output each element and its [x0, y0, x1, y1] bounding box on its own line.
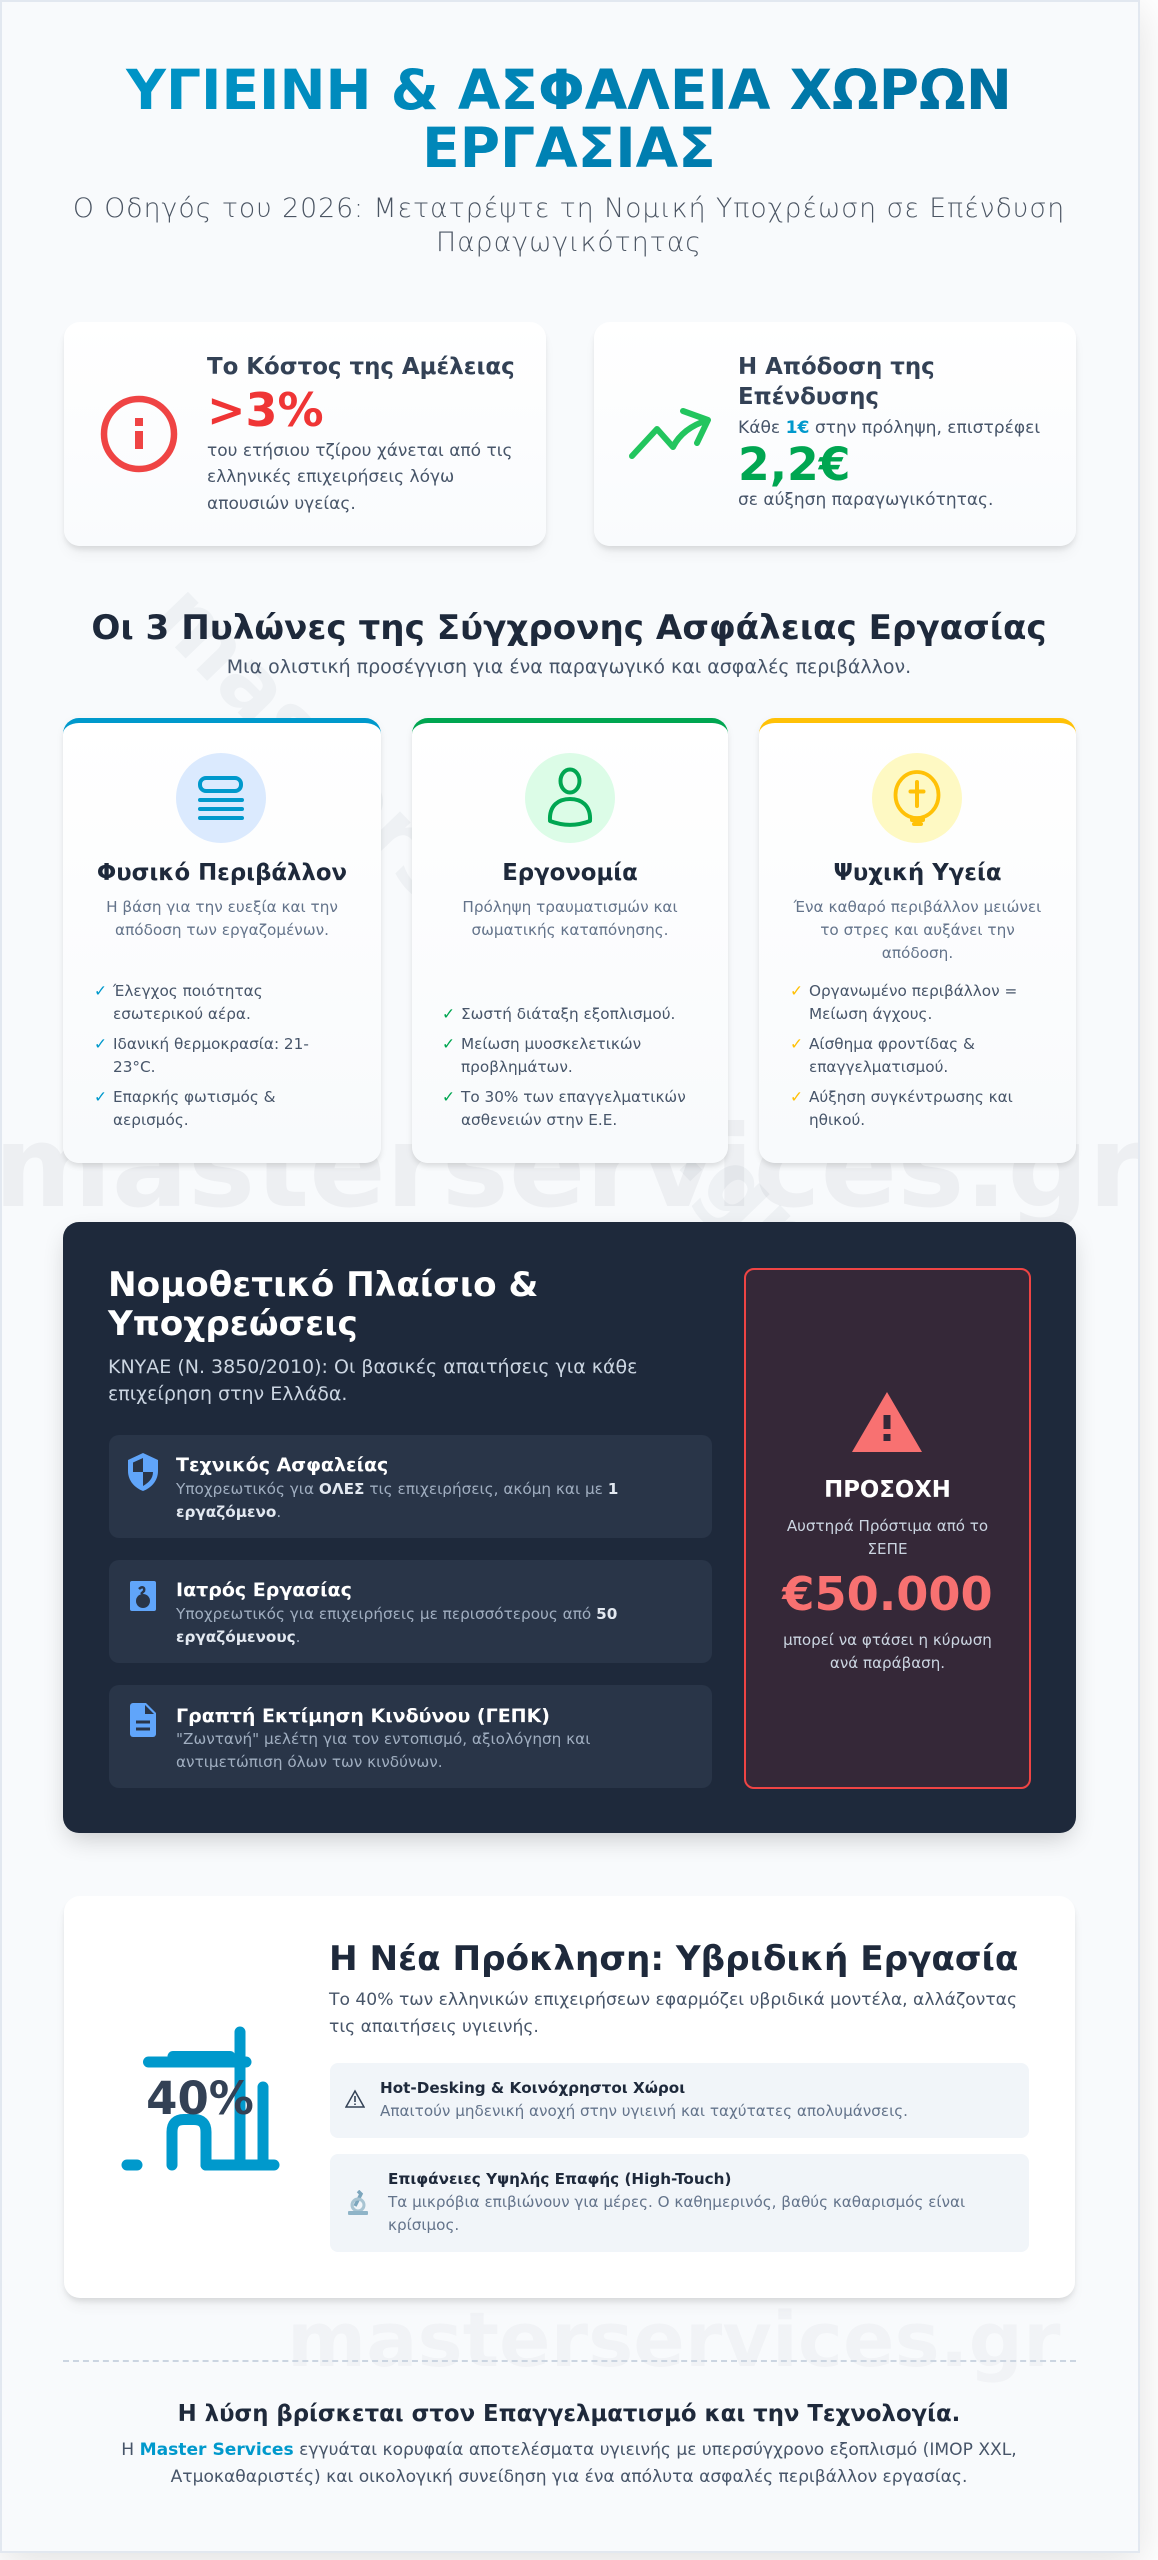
- icon: red info circle: [100, 396, 178, 472]
- list item: Μείωση άγχους.: [809, 1005, 932, 1023]
- title: Τεχνικός Ασφαλείας: [176, 1454, 388, 1476]
- obligation: risk assessment: [109, 1685, 712, 1788]
- obligation: occupational doctor: [109, 1560, 712, 1663]
- title: Ιατρός Εργασίας: [176, 1579, 352, 1601]
- list item: 23°C.: [113, 1058, 156, 1076]
- description 2: ανά παράβαση.: [830, 1654, 945, 1672]
- heading: Εργονομία: [502, 860, 638, 886]
- list item: Αίσθημα φροντίδας &: [809, 1035, 975, 1053]
- description: [794, 898, 1041, 962]
- title: [2, 62, 1136, 177]
- list item: [94, 1088, 276, 1129]
- list item: επαγγελματισμού.: [809, 1058, 948, 1076]
- checklist: ✓: [94, 1088, 107, 1106]
- subtitle: [73, 193, 1065, 258]
- checklist: ✓: [442, 1035, 455, 1053]
- list item: αερισμός.: [113, 1111, 189, 1129]
- heading: Νομοθετικό Πλαίσιο &: [108, 1265, 538, 1305]
- list item: [790, 1088, 1013, 1129]
- footer heading: Η λύση βρίσκεται στον Επαγγελματισμό και την Τεχνολογία.: [178, 2401, 960, 2427]
- description 2: [783, 1631, 992, 1672]
- description: κρίσιμος.: [388, 2216, 459, 2234]
- list item: Έλεγχος ποιότητας: [113, 982, 263, 1000]
- list item: ηθικού.: [809, 1111, 865, 1129]
- heading: Η Νέα Πρόκληση: Υβριδική Εργασία: [329, 1939, 1018, 1979]
- title: ΕΡΓΑΣΙΑΣ: [422, 116, 716, 180]
- description: ελληνικές επιχειρήσεις λόγω: [207, 467, 454, 487]
- heading: ΠΡΟΣΟΧΗ: [824, 1477, 951, 1503]
- list item: Οργανωμένο περιβάλλον =: [809, 982, 1017, 1000]
- stat: over 3 percent: >3%: [207, 383, 324, 437]
- description line 2: σε αύξηση παραγωγικότητας.: [738, 490, 993, 510]
- icon: green trending arrow: [629, 408, 711, 459]
- callout: fine warning: [744, 1268, 1031, 1789]
- description: [176, 1604, 617, 1646]
- footer divider line: [63, 2360, 1076, 2362]
- box: high touch surfaces: [330, 2154, 1029, 2252]
- icon: shield: [128, 1453, 158, 1491]
- description: [787, 1517, 988, 1558]
- description: το στρες και αυξάνει την: [820, 921, 1015, 939]
- stat: 2.2 euro: 2,2€: [738, 438, 850, 491]
- checklist: [790, 982, 1017, 1129]
- watermark: bottom: masterservices.gr: [287, 2295, 1061, 2384]
- panel: physical environment: [63, 718, 381, 1163]
- subheading: ΚΝΥΑΕ (Ν. 3850/2010): Οι βασικές απαιτήσεις για κάθε: [108, 1356, 637, 1378]
- heading: Επένδυσης: [738, 384, 879, 410]
- footer text: [121, 2440, 1017, 2487]
- checklist: [94, 982, 309, 1129]
- list item: [94, 1035, 309, 1076]
- icon: document: [130, 1703, 156, 1737]
- list item: Επαρκής φωτισμός &: [113, 1088, 276, 1106]
- heading: Ψυχική Υγεία: [834, 860, 1001, 886]
- obligation: safety technician: [109, 1435, 712, 1538]
- checklist: ✓: [790, 1088, 803, 1106]
- description: "Ζωντανή" μελέτη για τον εντοπισμό, αξιολόγηση και: [176, 1730, 590, 1748]
- list item: εσωτερικού αέρα.: [113, 1005, 251, 1023]
- footer text: Η Master Services εγγυάται κορυφαία αποτελέσματα υγιεινής με υπερσύγχρονο εξοπλισμό (ΙΜΟΡ XXL,: [121, 2440, 1017, 2460]
- list item: [442, 1088, 686, 1129]
- checklist: ✓: [442, 1088, 455, 1106]
- description: Πρόληψη τραυματισμών και: [462, 898, 678, 916]
- description: απόδοση των εργαζομένων.: [115, 921, 329, 939]
- icon: 40 percent chart: 40%: [146, 2072, 254, 2125]
- description: [388, 2193, 965, 2234]
- title: Γραπτή Εκτίμηση Κινδύνου (ΓΕΠΚ): [176, 1704, 550, 1726]
- description: αντιμετώπιση όλων των κινδύνων.: [176, 1753, 443, 1771]
- description 2: μπορεί να φτάσει η κύρωση: [783, 1631, 992, 1649]
- checklist: ✓: [442, 1005, 455, 1023]
- description line: Κάθε 1€ στην πρόληψη, επιστρέφει: [738, 418, 1040, 438]
- description: ΣΕΠΕ: [868, 1540, 907, 1558]
- icon: 40 percent chart: [122, 2026, 280, 2170]
- description: σωματικής καταπόνησης.: [471, 921, 669, 939]
- description: απόδοση.: [882, 944, 953, 962]
- description: εργαζόμενους.: [176, 1628, 301, 1646]
- checklist: ✓: [94, 982, 107, 1000]
- checklist: ✓: [790, 982, 803, 1000]
- heading: Η Απόδοση της: [738, 354, 935, 380]
- section heading: pillars: Οι 3 Πυλώνες της Σύγχρονης Ασφάλειας Εργασίας: [91, 608, 1047, 648]
- subheading: [108, 1356, 637, 1405]
- description: Υποχρεωτικός για επιχειρήσεις με περισσότερους από 50: [176, 1604, 617, 1622]
- description: του ετήσιου τζίρου χάνεται από τις: [207, 441, 512, 461]
- title: ΥΓΙΕΙΝΗ & ΑΣΦΑΛΕΙΑ ΧΩΡΩΝ: [126, 58, 1012, 122]
- description: τις απαιτήσεις υγιεινής.: [329, 2016, 539, 2036]
- panel: ergonomics: [412, 718, 728, 1163]
- panel: legal framework: [63, 1222, 1076, 1833]
- icon: doctor badge: [130, 1581, 156, 1611]
- subtitle: Ο Οδηγός του 2026: Μετατρέψτε τη Νομική Υποχρέωση σε Επένδυση: [73, 193, 1065, 224]
- watermark: horizontal centre: masterservices.gr: [0, 1101, 1140, 1233]
- heading: [108, 1265, 538, 1344]
- description: [207, 441, 512, 514]
- subheading: επιχείρηση στην Ελλάδα.: [108, 1383, 347, 1405]
- footer text: Ατμοκαθαριστές) και οικολογική συνείδηση για ένα απόλυτα ασφαλές περιβάλλον εργασίας.: [171, 2467, 967, 2487]
- list item: [442, 1035, 641, 1076]
- icon: yellow circle with bulb: [872, 753, 962, 843]
- description: [106, 898, 338, 939]
- description: Απαιτούν μηδενική ανοχή στην υγιεινή και ταχύτατες απολυμάνσεις.: [380, 2102, 908, 2120]
- description: [176, 1480, 618, 1520]
- subtitle: Παραγωγικότητας: [436, 227, 702, 258]
- stat: fine amount: €50.000: [782, 1567, 993, 1621]
- checklist: ✓: [790, 1035, 803, 1053]
- panel: hybrid work: [64, 1896, 1075, 2298]
- list item: Μείωση μυοσκελετικών: [461, 1035, 641, 1053]
- list item: [790, 982, 1017, 1023]
- list item: Σωστή διάταξη εξοπλισμού.: [461, 1005, 675, 1023]
- list item: Το 30% των επαγγελματικών: [461, 1088, 686, 1106]
- description: Υποχρεωτικός για ΟΛΕΣ τις επιχειρήσεις, ακόμη και με 1: [176, 1480, 618, 1498]
- title: Hot-Desking & Κοινόχρηστοι Χώροι: [380, 2079, 685, 2097]
- list item: Αύξηση συγκέντρωσης και: [809, 1088, 1013, 1106]
- list item: προβλημάτων.: [461, 1058, 573, 1076]
- panel: mental health: [759, 718, 1076, 1163]
- description: εργαζόμενο.: [176, 1502, 281, 1520]
- description: [176, 1730, 590, 1771]
- description: Αυστηρά Πρόστιμα από το: [787, 1517, 988, 1535]
- description: Ένα καθαρό περιβάλλον μειώνει: [794, 898, 1041, 916]
- description: Η βάση για την ευεξία και την: [106, 898, 338, 916]
- heading: Το Κόστος της Αμέλειας: [207, 354, 515, 380]
- checklist: ✓: [94, 1035, 107, 1053]
- section subheading: pillars: Μια ολιστική προσέγγιση για ένα παραγωγικό και ασφαλές περιβάλλον.: [227, 656, 911, 678]
- heading: [738, 354, 935, 410]
- stat card: return on investment: [594, 322, 1076, 546]
- title: Επιφάνειες Υψηλής Επαφής (High-Touch): [388, 2170, 731, 2188]
- icon: green circle with person: [525, 753, 615, 843]
- description: απουσιών υγείας.: [207, 494, 356, 514]
- description: [328, 1990, 1017, 2036]
- checklist: [442, 1005, 686, 1129]
- description: [462, 898, 678, 939]
- list item: Ιδανική θερμοκρασία: 21-: [113, 1035, 309, 1053]
- watermark: diagonal: masterservices.gr: [133, 563, 829, 1279]
- box: hot desking: [330, 2063, 1029, 2138]
- list item: [790, 1035, 975, 1076]
- list item: ασθενειών στην Ε.Ε.: [461, 1111, 617, 1129]
- description: Το 40% των ελληνικών επιχειρήσεων εφαρμόζει υβριδικά μοντέλα, αλλάζοντας: [329, 1990, 1017, 2010]
- heading: Υποχρεώσεις: [108, 1304, 358, 1344]
- stat card: cost of neglect: [64, 322, 546, 546]
- heading: Φυσικό Περιβάλλον: [97, 860, 347, 886]
- icon: microscope: [348, 2190, 368, 2215]
- description: Τα μικρόβια επιβιώνουν για μέρες. Ο καθημερινός, βαθύς καθαρισμός είναι: [388, 2193, 965, 2211]
- icon: warning sign: [345, 2090, 365, 2108]
- icon: warning triangle: [852, 1392, 922, 1452]
- list item: [94, 982, 263, 1023]
- icon: blue circle with lines: [176, 753, 266, 843]
